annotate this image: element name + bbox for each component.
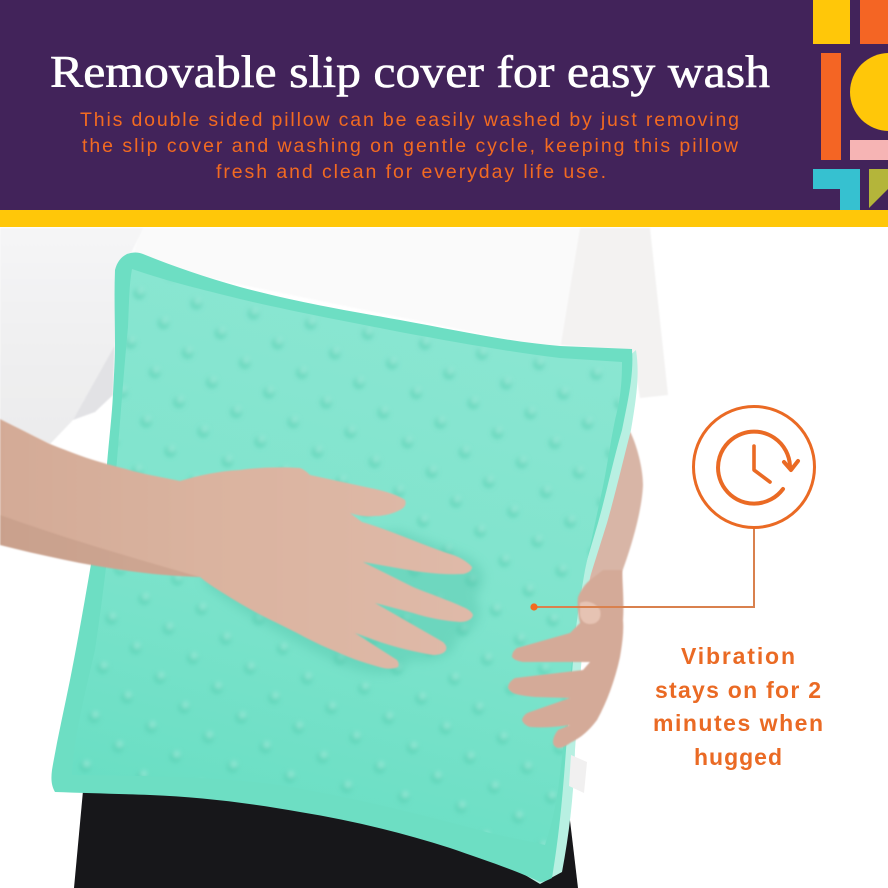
black trousers: [74, 780, 578, 888]
description text: the slip cover and washing on gentle cycle, keeping this pillow: [82, 135, 739, 157]
pillow face: [72, 269, 622, 845]
pillow: [50, 250, 650, 888]
title: Removable slip cover for easy wash: [50, 47, 770, 97]
right forearm behind pillow: [585, 425, 643, 610]
sherpa back edge: [500, 350, 638, 884]
callout connector line: [534, 528, 754, 607]
callout text: minutes when: [653, 710, 823, 736]
callout text: [653, 643, 823, 770]
photo background: [0, 227, 888, 888]
pillow label tag: [569, 755, 587, 793]
white t-shirt: [0, 228, 668, 444]
pillow border: [51, 252, 632, 882]
right hand: [508, 570, 623, 748]
description text: fresh and clean for everyday life use.: [216, 161, 606, 183]
callout dot: [530, 603, 538, 611]
icon: clock with arrow: [694, 406, 814, 528]
minky dots: [83, 290, 618, 845]
hand shadow on pillow: [200, 530, 484, 674]
header panel: [0, 0, 888, 227]
description text: This double sided pillow can be easily washed by just removing: [80, 109, 739, 131]
yellow band: [0, 210, 888, 227]
description text: [80, 109, 739, 183]
callout text: Vibration: [681, 643, 795, 669]
callout text: stays on for 2: [655, 677, 821, 703]
left arm and hand: [0, 419, 473, 669]
decorative geometric blocks: [813, 0, 888, 210]
callout text: hugged: [694, 744, 782, 770]
